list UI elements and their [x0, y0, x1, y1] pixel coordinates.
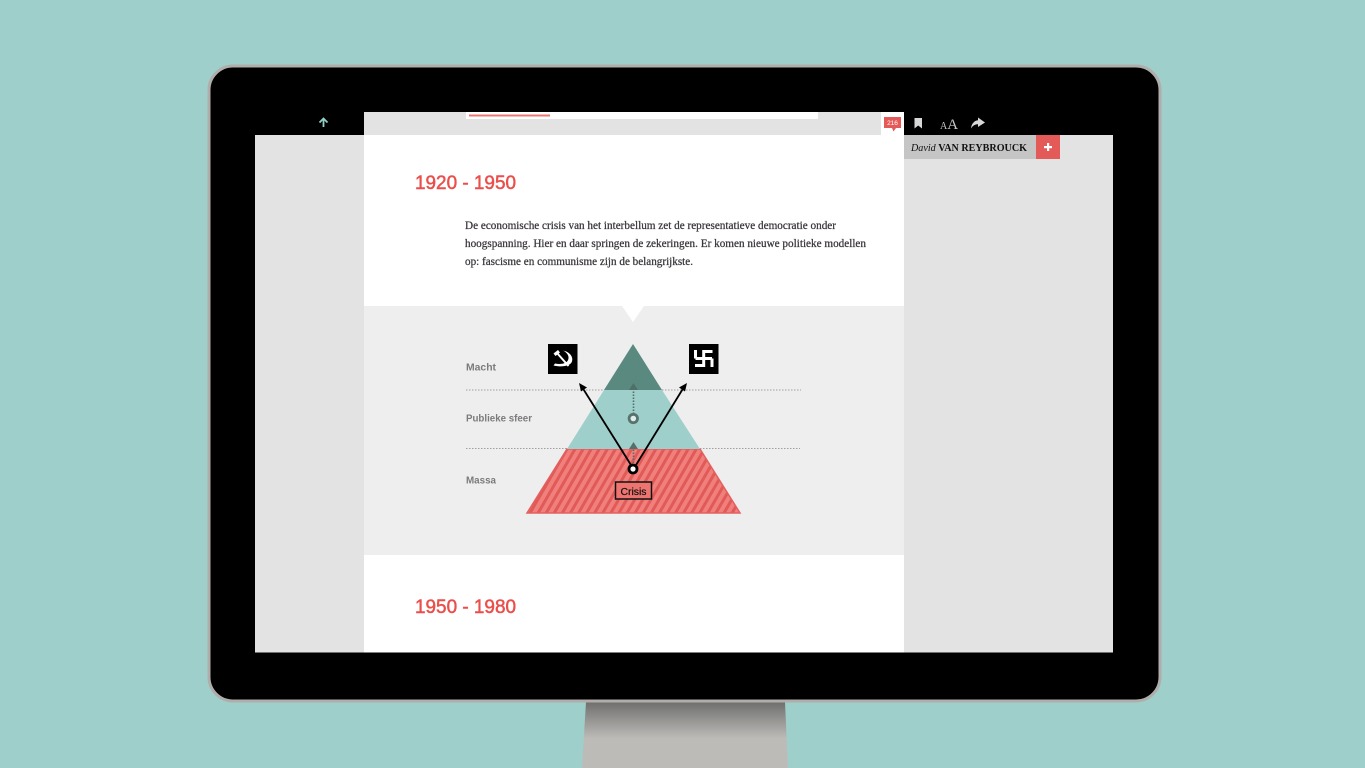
pyramid	[527, 344, 740, 513]
top page band	[364, 112, 881, 135]
author bar	[904, 135, 1036, 159]
intro text	[465, 220, 866, 268]
inner dotted arrow: upper	[629, 383, 638, 414]
panel pointer	[622, 306, 644, 322]
intro text: De economische crisis van het interbellum zet de representatieve democratie onder	[465, 220, 836, 232]
level label: Massa: Massa	[466, 474, 496, 486]
inner dotted arrow: lower	[629, 442, 638, 466]
screen	[255, 112, 1113, 652]
label: Crisis: Crisis	[620, 486, 646, 498]
level label: Publieke sfeer: Publieke sfeer	[466, 412, 532, 424]
node: crisis origin	[629, 465, 637, 473]
left margin	[255, 135, 364, 652]
icon: bookmark	[914, 118, 922, 128]
icon: share arrow	[971, 118, 985, 128]
arrow: to fascism	[636, 383, 687, 465]
pyramid tier: Macht	[604, 344, 662, 390]
node: publieke sfeer	[629, 414, 638, 423]
pyramid tier: Publieke sfeer	[567, 390, 700, 449]
icon: fascist symbol	[689, 344, 718, 374]
comment badge	[881, 112, 904, 135]
pyramid tier: Massa	[527, 449, 740, 513]
heading: 1950 - 1980: 1950 - 1980	[415, 597, 516, 618]
level label: Macht: Macht	[466, 362, 496, 374]
icon: font size: AA	[940, 117, 958, 133]
monitor stand	[582, 702, 788, 768]
intro text: hoogspanning. Hier en daar springen de zekeringen. Er komen nieuwe politieke modellen	[465, 238, 866, 250]
monitor	[209, 66, 1160, 701]
arrow: to communism	[579, 383, 631, 465]
icon: up arrow	[320, 118, 328, 127]
diagram panel	[364, 306, 904, 555]
intro text: op: fascisme en communisme zijn de belangrijkste.	[465, 256, 693, 268]
plus button	[1036, 135, 1060, 159]
monitor bezel	[209, 66, 1160, 701]
right margin	[904, 135, 1113, 652]
progress bar	[466, 112, 818, 119]
author bar: David VAN REYBROUCK	[910, 142, 1027, 154]
article column	[364, 135, 904, 652]
heading: 1920 - 1950: 1920 - 1950	[415, 173, 516, 194]
label: Crisis	[616, 482, 652, 499]
panel background	[364, 306, 904, 555]
icon: hammer and sickle	[548, 344, 578, 374]
comment badge: 216	[887, 120, 898, 127]
